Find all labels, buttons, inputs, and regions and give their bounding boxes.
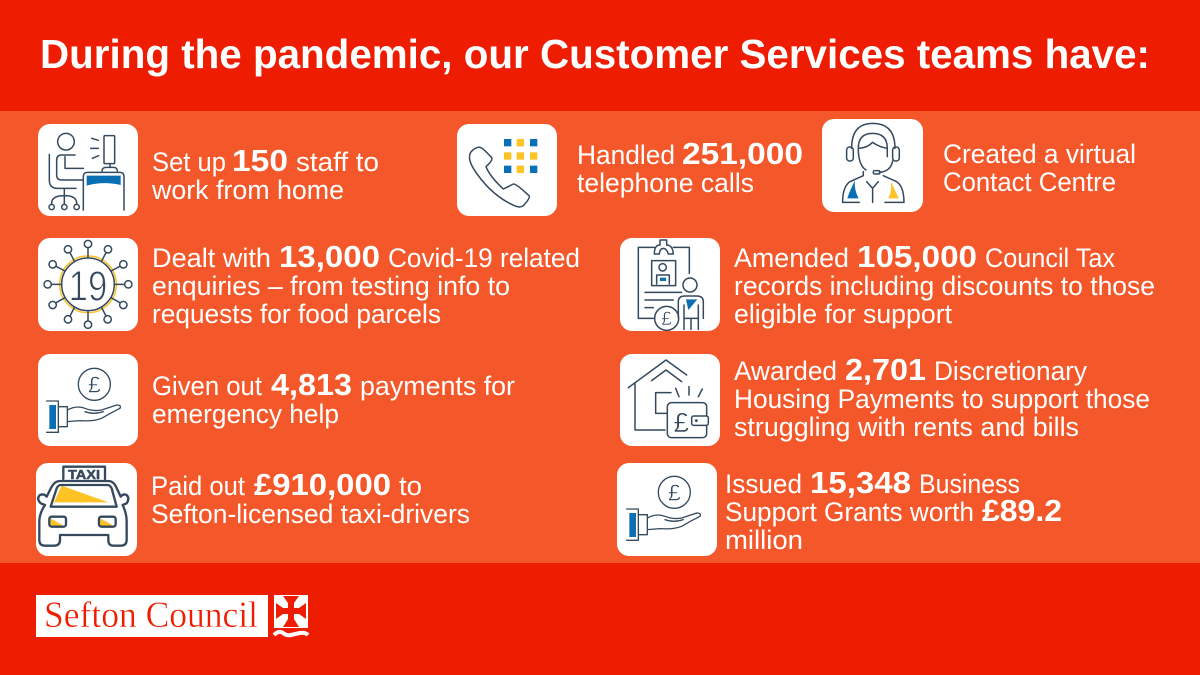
- text: discretionary housing payments: 2,701: [845, 352, 926, 387]
- text: business support grants: Support Grants worth: [725, 497, 974, 527]
- title: During the pandemic, our Customer Services teams have:: [40, 31, 1150, 77]
- text: amended council tax records: Amended: [734, 243, 849, 273]
- text: discretionary housing payments: Discretionary: [934, 356, 1087, 386]
- footer banner: [0, 563, 1200, 675]
- text: business support grants: [725, 465, 1062, 555]
- text: covid enquiries: 13,000: [279, 239, 380, 274]
- text: set up 150 staff: [151, 143, 379, 205]
- text: discretionary housing payments: [734, 352, 1150, 442]
- text: business support grants: £89.2: [982, 493, 1062, 528]
- text: amended council tax records: 105,000: [857, 239, 977, 274]
- text: taxi driver payments: Paid out: [151, 471, 245, 501]
- text: emergency payments: payments for: [360, 371, 515, 401]
- text: handled 251,000 calls: 251,000: [682, 136, 803, 171]
- text: handled 251,000 calls: telephone calls: [577, 168, 754, 198]
- text: discretionary housing payments: Awarded: [734, 356, 837, 386]
- text: taxi driver payments: £910,000: [254, 467, 391, 502]
- icon: hand holding pound coin: [38, 354, 138, 446]
- icon: hand holding pound coin: £: [668, 480, 681, 506]
- item: virtual contact centre: [822, 119, 1136, 212]
- icon: house and wallet: £: [674, 407, 690, 438]
- item: business support grants: [617, 463, 1062, 556]
- text: covid enquiries: Dealt with: [152, 243, 271, 273]
- text: emergency payments: emergency help: [152, 399, 339, 429]
- text: discretionary housing payments: Housing Payments to support those: [734, 384, 1150, 414]
- item: telephone calls: [457, 124, 803, 216]
- text: emergency payments: [152, 367, 515, 429]
- text: amended council tax records: eligible for support: [734, 299, 952, 329]
- text: covid enquiries: [152, 239, 580, 329]
- icon: taxi: TAXI: [68, 467, 100, 482]
- text: set up 150 staff: work from home: [151, 175, 344, 205]
- text: business support grants: 15,348: [810, 465, 911, 500]
- text: set up 150 staff: staff to: [296, 147, 379, 177]
- item: staff working from home: [38, 124, 379, 216]
- text: set up 150 staff: Set up: [152, 147, 226, 177]
- item: discretionary housing payments: [620, 352, 1150, 446]
- text: created a virtual contact centre: Contact Centre: [943, 167, 1116, 197]
- text: set up 150 staff: 150: [232, 143, 288, 178]
- icon: hand holding pound coin: £: [88, 372, 101, 398]
- top banner: [0, 0, 1200, 111]
- text: discretionary housing payments: struggling with rents and bills: [734, 412, 1079, 442]
- icon: taxi: [36, 463, 137, 556]
- icon: virus with 19: 19: [69, 263, 107, 311]
- item: taxi driver payments: [36, 463, 470, 556]
- text: covid enquiries: enquiries – from testing info to: [152, 271, 510, 301]
- item: council tax records: [620, 238, 1155, 331]
- icon: hand holding pound coin: [617, 463, 717, 556]
- text: amended council tax records: records including discounts to those: [734, 271, 1155, 301]
- logo crest: [274, 595, 308, 635]
- text: amended council tax records: [734, 239, 1155, 329]
- icon: person at desk: [38, 124, 138, 216]
- text: taxi driver payments: [151, 467, 470, 529]
- icon: clipboard with person and pound: £: [661, 309, 672, 330]
- text: emergency payments: 4,813: [271, 367, 352, 402]
- icon: virus with 19: [38, 238, 138, 331]
- item: emergency payments: [38, 354, 515, 446]
- text: covid enquiries: Covid-19 related: [388, 243, 580, 273]
- item: covid enquiries: [38, 238, 580, 331]
- text: amended council tax records: Council Tax: [985, 243, 1115, 273]
- logo: Sefton Council: Sefton Council: [44, 595, 258, 636]
- main orange panel: [0, 111, 1200, 563]
- icon: headset agent: [822, 119, 923, 212]
- text: business support grants: Business: [919, 469, 1020, 499]
- text: business support grants: million: [725, 525, 803, 555]
- text: created a virtual contact centre: Created a virtual: [943, 139, 1136, 169]
- text: covid enquiries: requests for food parcels: [152, 299, 441, 329]
- text: emergency payments: Given out: [152, 371, 262, 401]
- text: created a virtual contact centre: [943, 139, 1136, 197]
- text: business support grants: Issued: [725, 469, 802, 499]
- text: taxi driver payments: Sefton-licensed taxi-drivers: [151, 499, 470, 529]
- icon: telephone and keypad: [457, 124, 557, 216]
- icon: clipboard with person and pound: [620, 238, 720, 331]
- text: handled 251,000 calls: Handled: [577, 140, 675, 170]
- icon: house and wallet: [620, 354, 720, 446]
- text: handled 251,000 calls: [577, 136, 803, 198]
- text: taxi driver payments: to: [399, 471, 422, 501]
